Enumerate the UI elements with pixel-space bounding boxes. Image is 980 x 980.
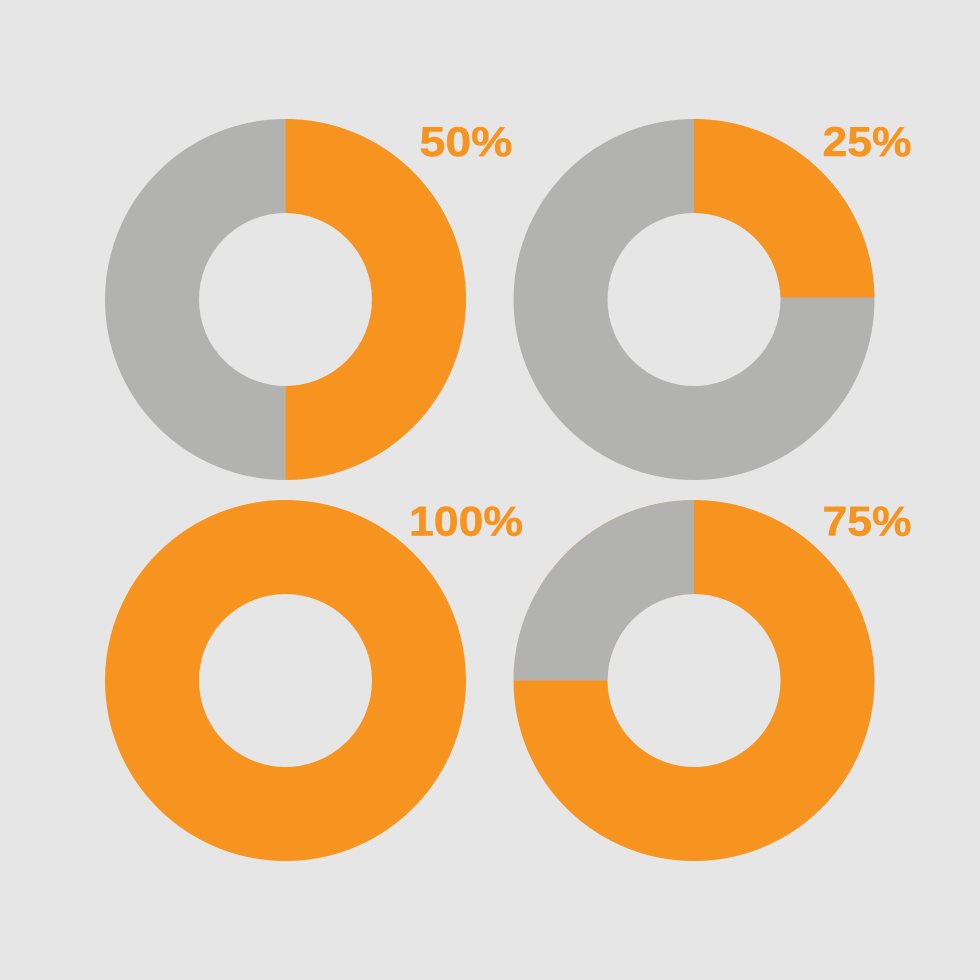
label: 100%: 100% — [409, 498, 523, 544]
label: 75%: 75% — [822, 498, 912, 544]
donut chart: 75% — [514, 500, 828, 814]
label: 50%: 50% — [420, 118, 512, 165]
label: 25%: 25% — [822, 118, 912, 165]
donut chart: 25% — [560, 119, 874, 433]
donut chart: 50% — [152, 119, 466, 480]
donut chart: 100% — [152, 547, 419, 814]
